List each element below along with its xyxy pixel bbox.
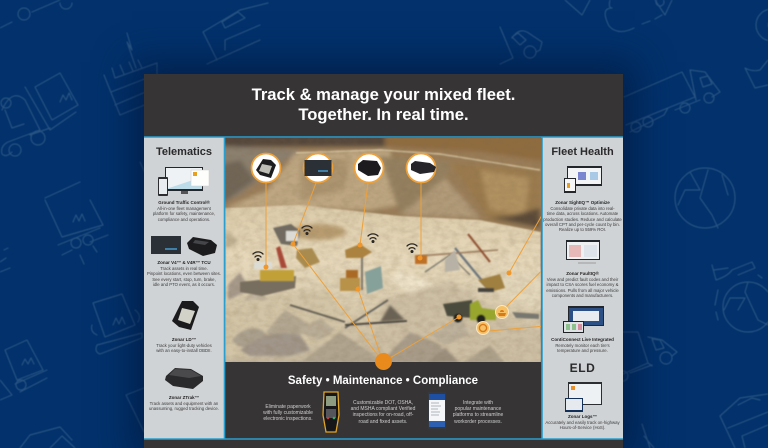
- text: zonar logs: Accurately and easily track on-highway: [545, 420, 620, 425]
- text: customizable inspections: [350, 400, 416, 425]
- panel: telematics: [144, 137, 224, 439]
- text: ground traffic control: compliance and operations.: [158, 217, 210, 222]
- text: ground traffic control: Ground Traffic Control®: [158, 200, 210, 205]
- text: conticonnect: temperature and pressure.: [557, 348, 608, 353]
- dump truck: [273, 224, 300, 246]
- heading: safety maintenance compliance: Safety • Maintenance • Compliance: [288, 375, 478, 387]
- text: sightiq: Realize up to 559% ROI.: [559, 227, 606, 232]
- text: zonar logs: [545, 414, 620, 430]
- text: ztrak: Track assets and equipment with an: [150, 401, 218, 406]
- icon: vibrating box: [92, 294, 142, 354]
- panel: safety maintenance compliance: [225, 362, 541, 438]
- texture: [225, 138, 541, 363]
- text: zonar logs: Hours-of-Service (HoS).: [560, 425, 605, 430]
- text: sightiq: production studies. Reduce and calculate: [543, 217, 622, 222]
- icon: wifi truck: [302, 226, 312, 234]
- title: [252, 85, 515, 124]
- blue frame lines: [144, 136, 623, 440]
- device callout: ztrak: [406, 154, 436, 182]
- quarry photo with connection lines: [225, 138, 541, 362]
- text: maintenance platforms: [453, 400, 504, 425]
- product image: sightiq: [564, 166, 602, 193]
- icon: truck right side: [618, 332, 677, 381]
- icon: tire badge: [476, 322, 490, 334]
- icon: globe: [675, 168, 735, 228]
- icon: forklift top: [0, 0, 72, 28]
- text: faultiq: impact to CSA scores fuel economy &: [547, 282, 618, 287]
- centre plant: [340, 266, 383, 294]
- sandy ground: [225, 205, 541, 363]
- rock backdrop: [220, 134, 546, 234]
- text: v4 tcu: See every start, stop, turn, brake,: [152, 277, 216, 282]
- text: v4 tcu: idle and PTO event, as it occurs.: [153, 282, 215, 287]
- text: electronic inspections: [263, 404, 313, 422]
- icon: long truck: [624, 70, 720, 132]
- device callout: zonar ld: [252, 154, 280, 182]
- brown haul road and sand patches: [225, 224, 541, 363]
- icon: forklift: [1, 73, 78, 156]
- orange connection lines: [266, 183, 558, 362]
- product image: conticonnect: [563, 306, 604, 333]
- bottom orange hub: [375, 353, 392, 370]
- text: zonar ld: Track your light-duty vehicles: [156, 343, 212, 348]
- green articulated truck: [443, 300, 496, 324]
- machinery: [240, 224, 539, 324]
- text: sightiq: [543, 200, 622, 232]
- text: customizable inspections: Customizable DOT, OSHA,: [353, 400, 413, 406]
- text: faultiq: Zonar FaultIQ®: [566, 271, 599, 276]
- text: v4 tcu: Pinpoint locations, even between sites.: [147, 271, 221, 276]
- gravel piles: [228, 272, 505, 363]
- text: faultiq: emissions. Pulls from all major vehicle: [546, 288, 619, 293]
- icon: left conveyor box: [0, 340, 47, 400]
- main panel: [144, 74, 623, 448]
- text: v4 tcu: Track assets in real time.: [160, 266, 208, 271]
- icon: globe partial right top: [756, 9, 768, 41]
- text: maintenance platforms: Integrate with: [463, 400, 493, 406]
- product image: zonar ld: [172, 301, 199, 330]
- text: ztrak: unassuming, rugged tracking device.: [149, 406, 219, 411]
- small orange machine: [415, 255, 427, 264]
- text: conticonnect: Remotely monitor each tire's: [555, 343, 610, 348]
- icon: warehouse bottom left: [20, 427, 75, 448]
- icon: phone with workorder app: [428, 392, 446, 429]
- text: ground traffic control: platform for safety, maintenance,: [153, 211, 215, 216]
- text: conticonnect: ContiConnect Live Integrated: [551, 337, 614, 342]
- debris and side containers: [512, 312, 539, 319]
- icon: wifi centre: [368, 234, 378, 242]
- icon: globe with ship: [712, 262, 768, 332]
- text: v4 tcu: Zonar V4™ & V4R™ TCU: [157, 260, 211, 265]
- text: sightiq: time data, across locations. Automate: [547, 211, 618, 216]
- product image: v4 tcu: [151, 236, 217, 256]
- icon: engine badge: [496, 306, 508, 318]
- icon: handheld inspection device: [322, 391, 340, 433]
- title: Together. In real time.: [298, 105, 469, 124]
- panel: fleet health: [542, 137, 623, 439]
- text: electronic inspections: with fully customizable: [263, 410, 313, 416]
- product image: zonar logs: [565, 382, 602, 412]
- text: sightiq: Consolidate private data into real-: [550, 206, 615, 211]
- icon: dashes left: [0, 248, 10, 272]
- text: customizable inspections: and MSHA compliant Verified: [351, 406, 415, 412]
- text: conticonnect: [551, 337, 614, 353]
- wifi icons: [253, 226, 417, 260]
- text: sightiq: Zonar SightIQ™ Optimize: [555, 200, 610, 205]
- orange anchor dots: [264, 242, 512, 320]
- title: Track & manage your mixed fleet.: [252, 85, 515, 104]
- device callout: v4 box: [304, 154, 332, 182]
- product image: ground traffic control: [158, 167, 209, 196]
- text: maintenance platforms: popular maintenance: [455, 406, 501, 412]
- icon: warehouse: [203, 3, 268, 64]
- left crushing plant: [240, 246, 296, 296]
- text: customizable inspections: inspections for on-road, off-: [353, 412, 413, 418]
- icon: warehouse right: [720, 394, 768, 448]
- text: faultiq: [546, 271, 619, 298]
- icon: wifi right: [407, 244, 417, 252]
- icon: truck cab top: [500, 27, 542, 64]
- icon: box lower: [45, 162, 146, 198]
- text: maintenance platforms: platforms to streamline: [453, 412, 503, 418]
- text: zonar ld: [156, 337, 212, 353]
- conveyors and plants: [290, 234, 498, 328]
- heading: telematics: Telematics: [156, 146, 212, 158]
- icon: route pins: [565, 0, 672, 32]
- text: zonar ld: with an easy-to-install OBDII.: [156, 348, 212, 353]
- text: ztrak: [149, 395, 219, 411]
- text: ztrak: Zonar ZTrak™: [169, 395, 199, 400]
- text: sightiq: overall CPT and per-cycle count by bin.: [545, 222, 620, 227]
- text: faultiq: components and manufacturers.: [552, 293, 613, 298]
- text: faultiq: View and predict fault codes and their: [547, 277, 618, 282]
- product image: faultiq: [566, 240, 600, 264]
- text: ground traffic control: All-in-one fleet management: [157, 206, 211, 211]
- text: zonar logs: Zonar Logs™: [568, 414, 597, 419]
- ledge highlight: [296, 150, 540, 170]
- heading: fleet health: Fleet Health: [551, 146, 614, 158]
- text: v4 tcu: [147, 260, 221, 287]
- device callout: v4r: [354, 154, 384, 182]
- icon: wifi left: [253, 252, 263, 260]
- icon: port tower and containers: [104, 33, 157, 115]
- heading: eld: ELD: [570, 361, 595, 375]
- icon: box bottom: [126, 388, 144, 432]
- icon: ship right: [745, 60, 768, 88]
- text: electronic inspections: Eliminate paperwork: [265, 404, 311, 410]
- text: zonar ld: Zonar LD™: [172, 337, 196, 342]
- product image: ztrak: [165, 368, 203, 389]
- text: customizable inspections: road and fixed assets.: [359, 419, 407, 425]
- text: electronic inspections: electronic inspections.: [263, 416, 313, 422]
- icon: conveyor box: [45, 200, 108, 264]
- right machines: [445, 250, 505, 292]
- icon: tower right: [642, 424, 654, 448]
- text: ground traffic control: [153, 200, 215, 222]
- text: maintenance platforms: workorder processes.: [454, 419, 502, 425]
- front loaders: [296, 244, 372, 268]
